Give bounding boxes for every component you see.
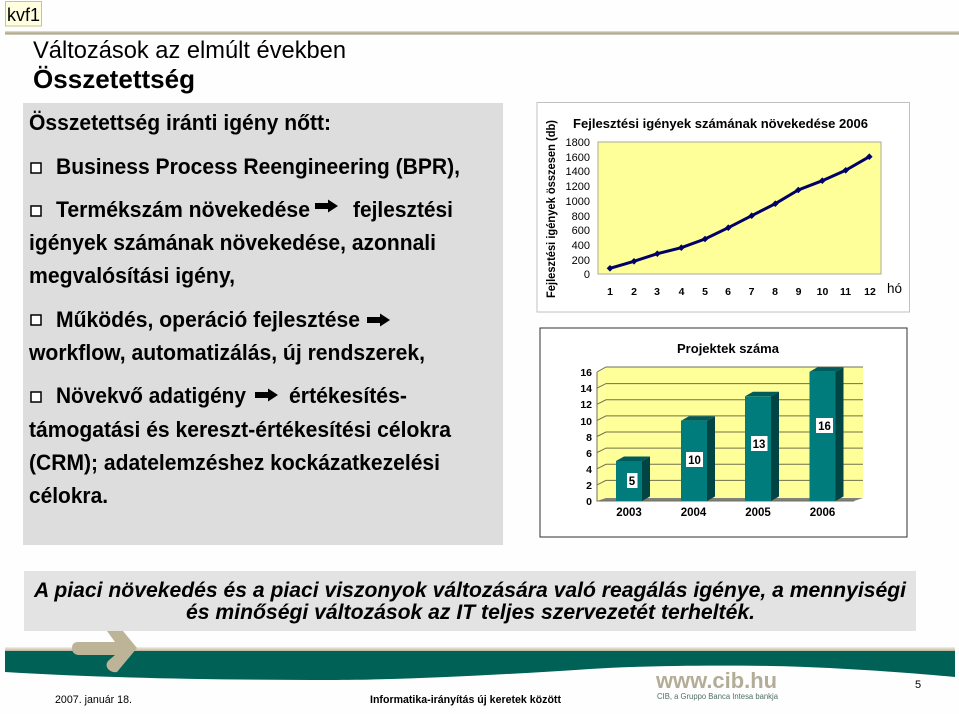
line chart x axis labels: 2 (631, 286, 637, 298)
icon: footer arrow (72, 631, 137, 672)
footer logo: CIB, a Gruppo Banca Intesa bankja (657, 692, 779, 701)
bar chart y axis labels (580, 367, 592, 508)
bar chart x axis labels: 2003 (616, 507, 642, 519)
bar chart y axis labels: 14 (580, 383, 592, 395)
line chart x axis labels (607, 286, 876, 298)
bullet: növekvő adatigény (29, 383, 452, 508)
bullet: növekvő adatigény: célokra. (29, 483, 108, 508)
title (33, 37, 346, 94)
bullet: BPR: Business Process Reengineering (BPR), (56, 154, 460, 179)
line chart x axis labels: 3 (654, 286, 660, 298)
line chart y axis labels: 1000 (566, 196, 590, 208)
callout (24, 571, 916, 631)
header tag kvf1: kvf1 (7, 4, 40, 25)
bullet: termékszám: igények számának növekedése, azonnali (29, 230, 436, 255)
bar chart y axis labels: 8 (586, 432, 592, 444)
line chart x axis labels: 6 (725, 286, 731, 298)
bullet: növekvő adatigény: támogatási és kereszt-értékesítési célokra (29, 417, 452, 442)
header rule (5, 31, 959, 35)
bullet: működés (28, 307, 425, 365)
panel heading: Összetettség iránti igény nőtt: (29, 110, 331, 135)
bullet: működés: Működés, operáció fejlesztése (56, 307, 360, 332)
bar chart y axis labels: 4 (586, 464, 592, 476)
bullet: működés: workflow, automatizálás, új rendszerek, (28, 340, 425, 365)
line chart x axis unit: hó (887, 281, 902, 296)
bar chart y axis labels: 6 (586, 448, 592, 460)
bullet: termékszám: megvalósítási igény, (29, 263, 235, 288)
line chart x axis labels: 11 (840, 286, 851, 298)
line chart x axis labels: 9 (796, 286, 802, 298)
line chart title: Fejlesztési igények számának növekedése 2006 (573, 116, 868, 131)
callout: és minőségi változások az IT teljes szervezetét terhelték. (186, 600, 755, 624)
line chart series (607, 153, 873, 272)
bar 2006 (810, 367, 844, 501)
bar chart y axis labels: 0 (586, 496, 592, 508)
page number: 5 (915, 679, 921, 691)
line chart y axis labels: 400 (572, 240, 590, 252)
line chart x axis labels: 4 (679, 286, 685, 298)
line chart x axis labels: 10 (817, 286, 828, 298)
footer center title: Informatika-irányítás új keretek között (370, 694, 561, 706)
bar chart y axis labels: 12 (580, 399, 592, 411)
bar 2006: 16 (818, 421, 831, 433)
line chart plot area (598, 142, 881, 274)
line chart x axis labels: 12 (864, 286, 876, 298)
callout: A piaci növekedés és a piaci viszonyok változására való reagálás igénye, a mennyiségi (33, 578, 907, 602)
line chart x axis labels: 8 (772, 286, 778, 298)
line chart panel (537, 102, 910, 312)
bar chart y axis labels: 2 (586, 480, 592, 492)
footer date: 2007. január 18. (55, 694, 132, 706)
line chart y axis labels: 200 (572, 255, 590, 267)
bar chart x axis labels (616, 507, 835, 519)
bar chart y axis labels: 10 (580, 416, 592, 428)
title: Változások az elmúlt években (33, 37, 346, 64)
line chart y axis labels: 0 (584, 269, 590, 281)
line chart x axis labels: 1 (607, 286, 613, 298)
bar 2005 (745, 392, 779, 501)
bullet: növekvő adatigény: értékesítés- (289, 383, 407, 408)
bullet: növekvő adatigény: Növekvő adatigény (56, 383, 247, 408)
line chart y axis labels: 1200 (566, 181, 590, 193)
bar chart y axis labels: 16 (580, 367, 592, 379)
bar chart x axis labels: 2004 (681, 507, 707, 519)
line chart x axis labels: 7 (749, 286, 755, 298)
title: Összetettség (33, 64, 195, 94)
line chart x axis labels: 5 (702, 286, 708, 298)
line chart y axis labels: 800 (572, 211, 590, 223)
line chart y axis labels: 1400 (566, 166, 590, 178)
footer logo: www.cib.hu (655, 668, 777, 693)
bar 2003 (616, 456, 650, 501)
bullet: termékszám (29, 197, 453, 288)
line chart y axis labels: 600 (572, 225, 590, 237)
footer band (5, 647, 955, 680)
line chart y axis labels: 1600 (566, 152, 590, 164)
line chart y axis title: Fejlesztési igények összesen (db) (546, 120, 558, 298)
bullet: termékszám: fejlesztési (353, 197, 453, 222)
bullet: termékszám: Termékszám növekedése (56, 197, 310, 222)
bar chart walls and grid (597, 367, 863, 501)
bullet: növekvő adatigény: (CRM); adatelemzéshez kockázatkezelési (29, 450, 440, 475)
bar chart x axis labels: 2006 (810, 507, 835, 519)
panel: left text panel (23, 103, 503, 545)
bar chart title: Projektek száma (677, 341, 780, 356)
bar 2003: 5 (629, 476, 636, 488)
bar chart panel (540, 328, 907, 537)
bar chart x axis labels: 2005 (745, 507, 771, 519)
line chart y axis labels: 1800 (566, 137, 590, 149)
bar 2005: 13 (753, 439, 765, 451)
bar 2004: 10 (688, 455, 701, 467)
line chart y axis labels (566, 137, 590, 281)
bar 2004 (681, 416, 715, 501)
